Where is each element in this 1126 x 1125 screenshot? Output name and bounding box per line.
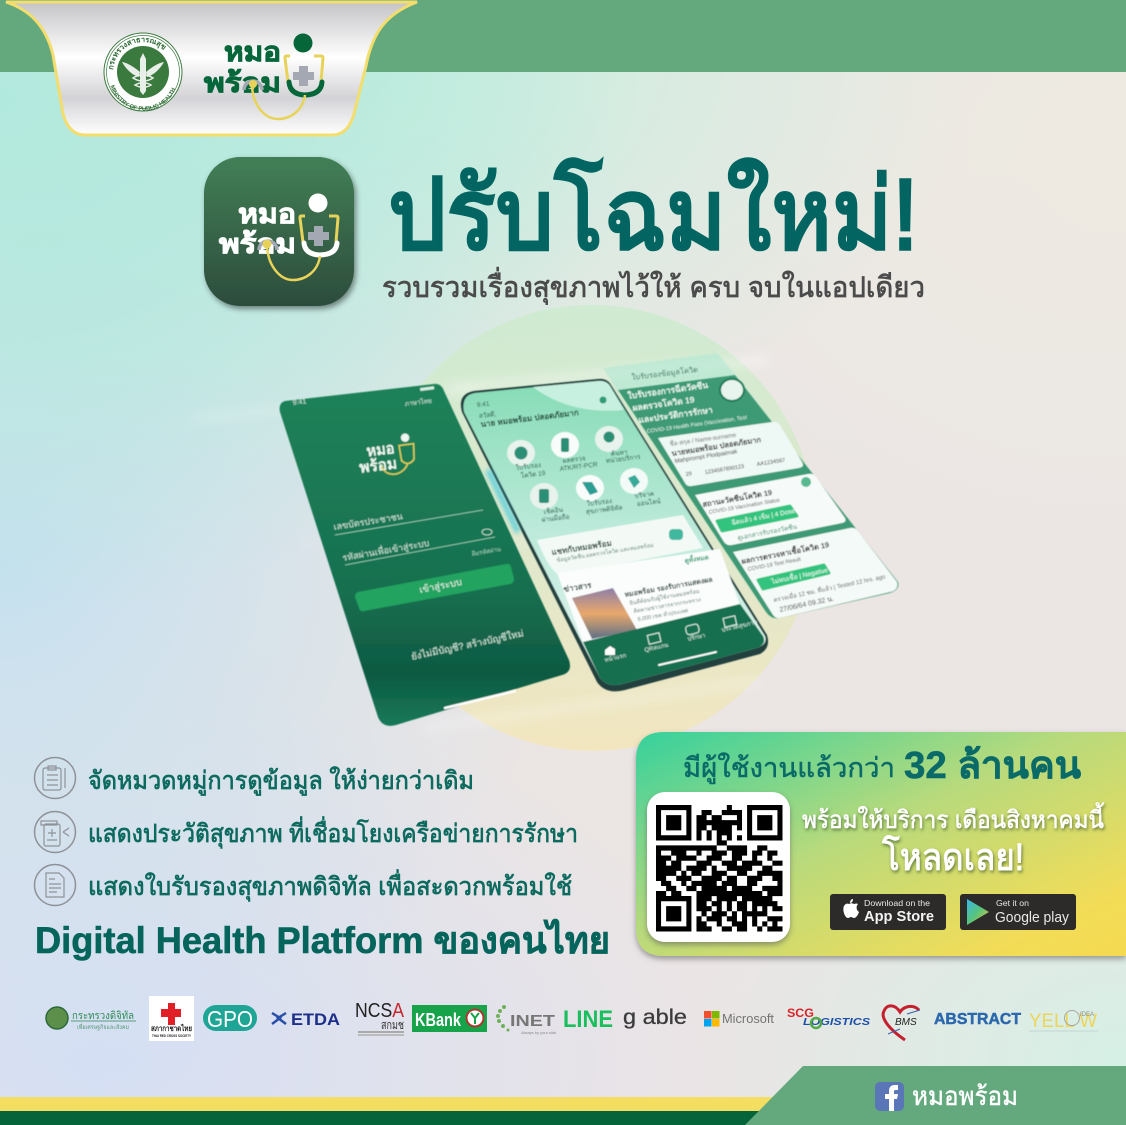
logo: bms bbox=[883, 1006, 920, 1040]
phone: login screen: ภาษาไทย bbox=[404, 397, 432, 408]
logo: scg logistics: SCG bbox=[787, 1006, 814, 1020]
panel heading: COVID-19 Health Pass (Vaccination, Test bbox=[646, 415, 748, 435]
title: ปรับโฉมใหม่! bbox=[388, 159, 918, 271]
icon: health certificate: สุขภาพดิจิทัล bbox=[585, 504, 623, 516]
download now: โหลดเลย! bbox=[882, 835, 1024, 879]
logo: ncsa: NCSA bbox=[355, 1000, 405, 1022]
national id field: เลขบัตรประชาชน bbox=[333, 511, 403, 532]
users heading: มีผู้ใช้งานแล้วกว่า bbox=[683, 752, 895, 784]
card: vaccination status: ฉีดแล้ว 4 เข็ม | 4 Doses bbox=[731, 505, 800, 527]
phone logo bbox=[356, 433, 417, 478]
login button bbox=[355, 564, 514, 611]
national id field bbox=[333, 510, 483, 535]
ministry of public health seal: กระทรวงสาธารณสุข bbox=[109, 38, 166, 70]
phone: home screen bbox=[461, 379, 768, 691]
card: test result: ตรวจเมื่อ 12 ชม. ที่แล้ว | Tested 12 hrs. ago bbox=[773, 572, 887, 604]
chat card: ข้อมูลวัคซีน ผลตรวจโควิด และหมอพร้อม bbox=[556, 541, 655, 564]
panel green sheet bbox=[618, 375, 898, 618]
google play button: Get it on bbox=[996, 898, 1029, 908]
icon: check in: ผ่านมือถือ bbox=[541, 513, 570, 524]
app icon bbox=[204, 157, 354, 306]
chat card bbox=[537, 515, 703, 575]
chat card: แชทกับหมอพร้อม bbox=[551, 538, 612, 557]
logo: thai red cross: สภากาชาดไทย bbox=[151, 1023, 192, 1033]
feature list bbox=[34, 758, 578, 906]
ministry of public health seal: MINISTRY OF PUBLIC HEALTH bbox=[110, 84, 176, 110]
home indicator bbox=[445, 691, 515, 708]
sign up link: ยังไม่มีบัญชี? สร้างบัญชีใหม่ bbox=[410, 627, 525, 663]
logo: etda bbox=[272, 1010, 340, 1029]
password field bbox=[341, 529, 501, 565]
icon: find clinic bbox=[595, 426, 641, 465]
card: patient: AA1234567 bbox=[756, 458, 786, 468]
app icon: หมอ bbox=[238, 199, 296, 229]
facebook name: หมอพร้อม bbox=[912, 1081, 1018, 1111]
logo: bms: BMS bbox=[895, 1017, 917, 1028]
logo: kbank bbox=[412, 1005, 487, 1032]
feature 3 bbox=[34, 864, 572, 906]
icon: test kit: ผลตรวจ bbox=[562, 455, 586, 465]
card: test result: 27/06/64 09.32 น. bbox=[779, 596, 835, 614]
download box bbox=[636, 732, 1126, 956]
app store button bbox=[830, 894, 946, 930]
greeting: นาย หมอพร้อม ปลอดภัยมาก bbox=[480, 407, 579, 429]
box background bbox=[636, 732, 1126, 956]
users heading: 32 ล้านคน bbox=[904, 745, 1081, 787]
card: vaccination status bbox=[695, 474, 846, 545]
logo: g-able: g able bbox=[623, 1006, 687, 1029]
bottom navigation bar: หน้าแรก bbox=[604, 652, 627, 664]
news section: ดูทั้งหมด bbox=[684, 551, 710, 566]
icon: check in bbox=[530, 483, 570, 524]
feature 1 bbox=[34, 758, 474, 798]
subtitle: รวบรวมเรื่องสุขภาพไว้ให้ ครบ จบในแอปเดียว bbox=[382, 267, 925, 305]
cyan glow on device edge bbox=[488, 470, 518, 532]
screen top highlight bbox=[533, 381, 624, 411]
card: test result: ไม่พบเชื้อ | Negative bbox=[770, 565, 829, 586]
panel heading bbox=[627, 380, 748, 435]
available in august: พร้อมให้บริการ เดือนสิงหาคมนี้ bbox=[802, 802, 1104, 834]
icon: find clinic: ค้นหา bbox=[610, 448, 628, 458]
icon: certificate bbox=[507, 440, 546, 480]
logo: scg logistics: LOGISTICS bbox=[803, 1017, 870, 1028]
panel top bbox=[603, 353, 738, 394]
news section: ข่าวสาร bbox=[563, 581, 593, 594]
header badge with logos bbox=[6, 0, 418, 136]
password field: รหัสผ่านเพื่อเข้าสู่ระบบ bbox=[341, 536, 430, 564]
card: test result: ผลการตรวจหาเชื้อโควิด 19 bbox=[740, 538, 830, 566]
icon: find clinic: หน่วยบริการ bbox=[605, 453, 641, 465]
feature 3: แสดงใบรับรองสุขภาพดิจิทัล เพื่อสะดวกพร้อมใช้ bbox=[88, 869, 572, 902]
card: vaccination status: สถานะวัคซีนโควิด 19 bbox=[702, 487, 773, 509]
digital health platform headline: Digital Health Platform ของคนไทย bbox=[35, 918, 610, 961]
card: test result bbox=[733, 528, 897, 618]
bottom navigation bar: ประวัติสุขภาพ bbox=[721, 619, 758, 634]
feature 2: แสดงประวัติสุขภาพ ที่เชื่อมโยงเครือข่ายการรักษา bbox=[88, 816, 578, 849]
app icon: พร้อม bbox=[219, 229, 296, 259]
device screen bbox=[463, 381, 766, 685]
logo: ncsa: สกมช bbox=[381, 1018, 404, 1032]
icon: digital certificate bbox=[34, 864, 76, 906]
partner logos bbox=[46, 996, 1098, 1041]
users heading bbox=[683, 745, 1081, 787]
icon: online donate bbox=[620, 468, 662, 508]
google play button: Google play bbox=[995, 909, 1069, 926]
logo: mor prom bbox=[204, 34, 323, 119]
logo: microsoft: Microsoft bbox=[722, 1011, 774, 1026]
ministry of public health seal bbox=[104, 32, 182, 112]
password field: ลืมรหัสผ่าน bbox=[471, 545, 501, 558]
logo: ministry of digital: กระทรวงดิจิทัล bbox=[72, 1010, 134, 1022]
phone: login screen bbox=[280, 384, 570, 726]
logo: abstract: ABSTRACT bbox=[934, 1011, 1021, 1028]
feature 1: จัดหมวดหมู่การดูข้อมูล ให้ง่ายกว่าเดิม bbox=[88, 766, 474, 796]
news section: 6,000 เขต ทั่วประเทศ bbox=[637, 606, 689, 623]
card: patient bbox=[658, 422, 803, 486]
logo: gpo: GPO bbox=[207, 1006, 253, 1032]
icon: certificate: โควิด 19 bbox=[520, 469, 546, 480]
logo: mor prom: หมอ bbox=[224, 37, 281, 67]
phone logo: พร้อม bbox=[358, 454, 398, 477]
logo: mor prom: พร้อม bbox=[204, 68, 281, 98]
logo: yellow idea: YELL W bbox=[1029, 1011, 1097, 1032]
qr code card bbox=[647, 792, 790, 942]
top green band bbox=[0, 0, 1126, 72]
bottom navigation bar bbox=[583, 604, 764, 685]
card: patient: 29 bbox=[685, 471, 692, 478]
news photo bbox=[572, 588, 637, 639]
icon: facebook bbox=[875, 1082, 904, 1111]
panel heading: และประวัติการรักษา bbox=[638, 405, 713, 425]
greeting bbox=[476, 396, 606, 429]
logo: inet: INET bbox=[510, 1013, 555, 1030]
card: patient: ชื่อ-สกุล / Name-surname bbox=[669, 431, 737, 448]
icon: medical record bbox=[34, 812, 76, 852]
logo: thai red cross bbox=[149, 996, 194, 1041]
light streaks bbox=[190, 357, 770, 732]
icon: test kit bbox=[551, 432, 598, 473]
logo: thai red cross: THAI RED CROSS SOCIETY bbox=[152, 1034, 192, 1038]
greeting: 9:41 bbox=[476, 401, 490, 409]
icon: online donate: บริจาค bbox=[634, 490, 655, 500]
card: patient: 1234567890123 bbox=[704, 464, 745, 476]
health pass panel bbox=[603, 353, 898, 618]
logo: ministry of digital: เพื่อเศรษฐกิจและสังคม bbox=[77, 1023, 129, 1031]
panel heading: ผลตรวจโควิด 19 bbox=[632, 394, 695, 413]
card: test result: COVID-19 Test Result bbox=[747, 557, 802, 573]
news section: ยินดีต้อนรับผู้ใช้งานหมอพร้อม bbox=[628, 588, 701, 607]
logo: kbank: KBank bbox=[415, 1010, 462, 1030]
icon: clipboard bbox=[34, 758, 76, 798]
card: patient: นายหมอพร้อม ปลอดภัยมาก bbox=[671, 435, 762, 458]
logo: ministry of digital bbox=[46, 1007, 136, 1031]
bottom navigation bar: QRสแกน bbox=[644, 642, 669, 654]
badge shape bbox=[6, 2, 417, 135]
card: patient: Mahprompt Plodpaimak bbox=[674, 449, 739, 465]
google play button bbox=[960, 894, 1076, 930]
pale circle behind phones bbox=[369, 305, 815, 751]
icon: health certificate bbox=[576, 475, 623, 516]
phone body bbox=[280, 384, 570, 726]
logo: inet: Always by your side bbox=[521, 1030, 557, 1035]
logo: scg logistics bbox=[787, 1006, 870, 1028]
login button: เข้าสู่ระบบ bbox=[418, 577, 463, 596]
health pass panel: ใบรับรองข้อมูลโควิด bbox=[631, 365, 699, 382]
device frame bbox=[461, 379, 768, 691]
app store button: Download on the bbox=[864, 898, 930, 908]
logo: yellow idea: IDEA bbox=[1080, 1012, 1094, 1018]
facebook panel bbox=[745, 1066, 1126, 1125]
bottom stripes bbox=[0, 1097, 790, 1125]
news section: หมอพร้อม รองรับการแสดงผล bbox=[624, 575, 713, 599]
small seal bbox=[720, 379, 744, 401]
icon: check in: เช็คอิน bbox=[543, 505, 564, 516]
icon: certificate: ใบรับรอง bbox=[515, 461, 542, 472]
icon: health certificate: ใบรับรอง bbox=[586, 497, 613, 508]
phone logo: หมอ bbox=[366, 440, 395, 460]
feature 2 bbox=[34, 812, 578, 852]
home indicator bbox=[659, 652, 716, 665]
card: vaccination status: ดูเอกสารรับรองวัคซีน bbox=[737, 522, 798, 542]
status bar: 9:41 bbox=[292, 398, 307, 407]
logo: etda: ETDA bbox=[291, 1010, 340, 1029]
logo: inet bbox=[496, 1005, 557, 1035]
card: vaccination status: COVID-19 Vaccination Status bbox=[708, 498, 781, 516]
news section bbox=[557, 549, 740, 642]
logo: ncsa bbox=[355, 1000, 405, 1036]
news section: ติดตามข่าวสารจากกระทรวง bbox=[633, 596, 702, 615]
bottom navigation bar: ปรึกษา bbox=[687, 632, 706, 643]
service icons bbox=[507, 426, 662, 524]
icon: test kit: ATK/RT-PCR bbox=[559, 461, 598, 473]
icon: online donate: ออนไลน์ bbox=[636, 497, 662, 508]
greeting: สวัสดี, bbox=[478, 410, 497, 420]
app store button: App Store bbox=[864, 908, 934, 925]
logo: line: LINE bbox=[563, 1006, 613, 1033]
panel heading: ใบรับรองการฉีดวัคซีน bbox=[627, 380, 709, 401]
